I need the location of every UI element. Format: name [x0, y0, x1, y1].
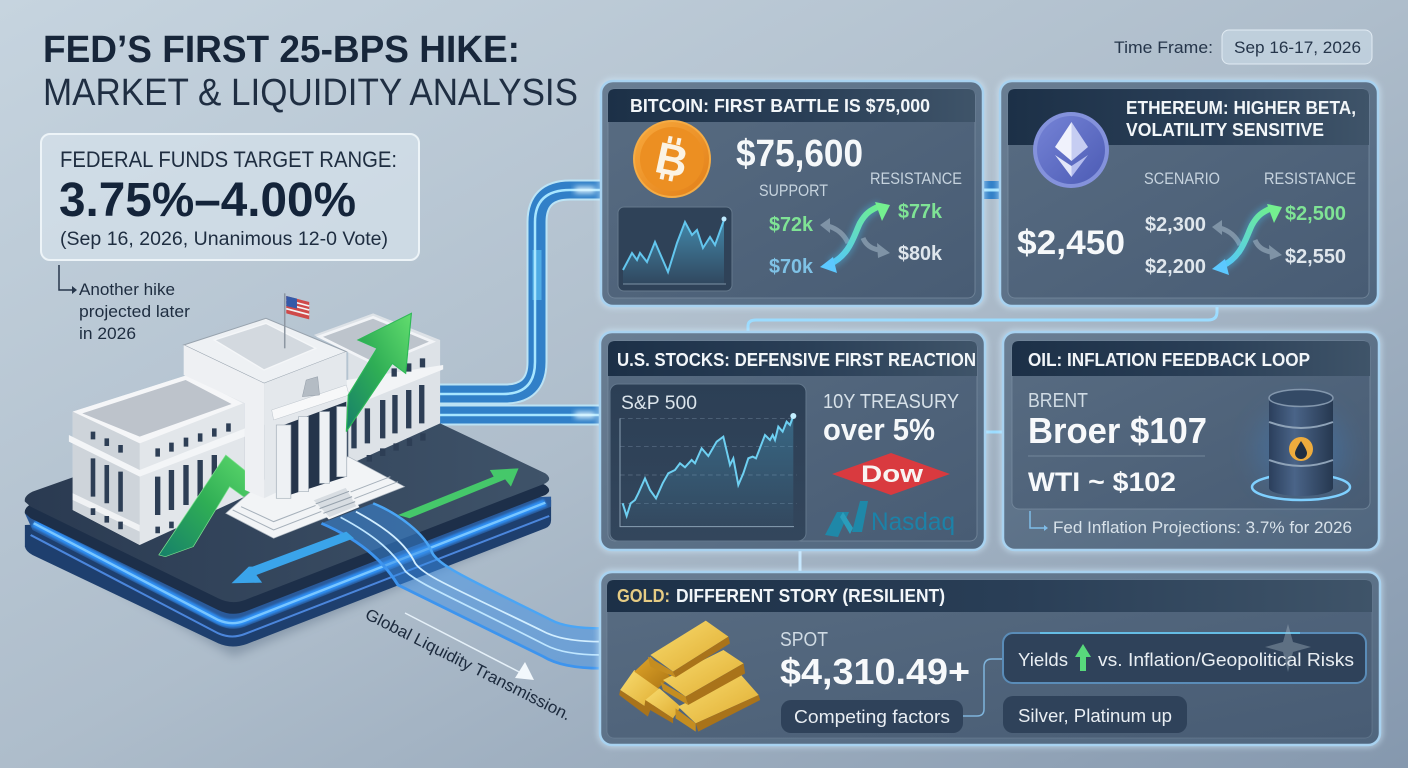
callout: federal funds target range	[41, 134, 419, 260]
note: another hike	[59, 265, 190, 343]
panel: bitcoin: $77k	[898, 201, 943, 223]
treasury: over 5%	[823, 412, 935, 447]
pill: silver platinum: Silver, Platinum up	[1018, 706, 1172, 726]
s&p 500 chart: S&P 500	[621, 392, 697, 414]
platform blue arrow	[232, 532, 354, 583]
s&p 500 chart	[610, 384, 806, 541]
title	[43, 29, 578, 114]
large green rising arrow	[346, 313, 411, 432]
scenario and resistance values: $2,300	[1145, 214, 1206, 236]
label: global liquidity transmission: Global Liquidity Transmission.	[362, 606, 574, 724]
header	[607, 580, 1372, 612]
spot price: $4,310.49+	[780, 651, 970, 692]
labels: SCENARIO	[1144, 170, 1220, 188]
spot price: SPOT	[780, 629, 828, 651]
icon: ethereum logo	[1033, 112, 1109, 188]
note: another hike: projected later	[79, 302, 190, 321]
header	[608, 341, 977, 376]
logo: dow: Dow	[861, 461, 923, 488]
prices: Broer $107	[1028, 410, 1207, 451]
box: yields vs risks: vs. Inflation/Geopolitical Risks	[1098, 650, 1354, 670]
labels: SUPPORT	[759, 181, 828, 200]
connector: liquidity pipes to panels	[440, 190, 1217, 574]
logo: nasdaq: Nasdaq	[871, 508, 955, 536]
platform lower slab	[25, 500, 551, 646]
panel: ethereum: $2,200	[1145, 256, 1206, 278]
panel: oil	[1003, 332, 1379, 550]
treasury	[823, 391, 959, 447]
pill: silver platinum	[1003, 696, 1187, 733]
platform top slab	[25, 425, 549, 614]
connector: competing factors to risks	[963, 659, 1003, 716]
panel: ethereum: RESISTANCE	[1264, 170, 1356, 188]
liquidity transmission streams	[321, 503, 601, 668]
mini chart	[618, 207, 732, 291]
prices: BRENT	[1028, 390, 1088, 412]
callout: federal funds target range: FEDERAL FUNDS TARGET RANGE:	[60, 147, 397, 172]
price: $2,450	[1017, 224, 1125, 262]
price: $75,600	[736, 133, 863, 175]
header: BITCOIN: FIRST BATTLE IS $75,000	[630, 95, 930, 116]
logo: nasdaq	[825, 501, 955, 537]
prices	[1028, 390, 1207, 497]
panel: bitcoin: $80k	[898, 243, 943, 265]
flag	[285, 293, 309, 348]
panel: gold	[600, 572, 1380, 745]
note: fed inflation projections: Fed Inflation Projections: 3.7% for 2026	[1053, 518, 1352, 537]
time frame	[1114, 30, 1372, 64]
time frame: Sep 16-17, 2026	[1234, 38, 1361, 57]
note: another hike: in 2026	[79, 324, 136, 343]
central block	[184, 318, 405, 538]
panel: u.s. stocks	[600, 332, 985, 550]
header: ETHEREUM: HIGHER BETA,	[1126, 97, 1356, 118]
pill: competing factors: Competing factors	[794, 707, 950, 727]
platform green arrow	[398, 468, 519, 518]
support and resistance values: $72k	[769, 214, 814, 236]
callout: federal funds target range: 3.75%–4.00%	[59, 174, 356, 227]
lower green rising arrow	[159, 455, 260, 557]
header: GOLD:	[617, 586, 670, 606]
callout: federal funds target range: (Sep 16, 2026, Unanimous 12-0 Vote)	[60, 229, 388, 250]
time frame: Time Frame:	[1114, 38, 1213, 57]
header: DIFFERENT STORY (RESILIENT)	[676, 586, 945, 606]
panel: bitcoin: RESISTANCE	[870, 169, 962, 188]
header: U.S. STOCKS: DEFENSIVE FIRST REACTION	[617, 349, 976, 370]
title: FED’S FIRST 25-BPS HIKE:	[43, 29, 520, 71]
treasury: 10Y TREASURY	[823, 391, 959, 413]
icon: oil barrel	[1252, 390, 1350, 500]
prices: WTI ~ $102	[1028, 467, 1176, 497]
pill: competing factors	[781, 700, 963, 733]
panel: bitcoin	[601, 81, 983, 306]
panel: bitcoin: $70k	[769, 256, 814, 278]
header	[608, 89, 975, 122]
box: yields vs risks: Yields	[1018, 650, 1068, 670]
illustration: federal reserve building on platform	[25, 293, 601, 668]
logo: dow	[832, 453, 950, 495]
note: another hike: Another hike	[79, 280, 175, 299]
header: VOLATILITY SENSITIVE	[1126, 119, 1324, 140]
panel: ethereum	[1000, 81, 1378, 306]
header: OIL: INFLATION FEEDBACK LOOP	[1028, 349, 1310, 370]
spot price	[780, 629, 970, 692]
arrows: scenario resistance	[1212, 204, 1282, 275]
panel: ethereum: $2,500	[1285, 203, 1346, 225]
note: fed inflation projections	[1030, 511, 1352, 537]
arrows: support resistance	[820, 202, 890, 273]
header	[1008, 89, 1369, 145]
building left wing	[69, 375, 245, 545]
building right wing	[314, 313, 443, 465]
panel: ethereum: $2,550	[1285, 246, 1346, 268]
icon: bitcoin coin	[634, 121, 710, 197]
title: MARKET & LIQUIDITY ANALYSIS	[43, 72, 578, 114]
box: yields vs risks	[1003, 624, 1366, 683]
header	[1012, 341, 1370, 376]
icon: gold bars	[619, 621, 760, 732]
icon: bitcoin coin: B	[651, 133, 692, 188]
